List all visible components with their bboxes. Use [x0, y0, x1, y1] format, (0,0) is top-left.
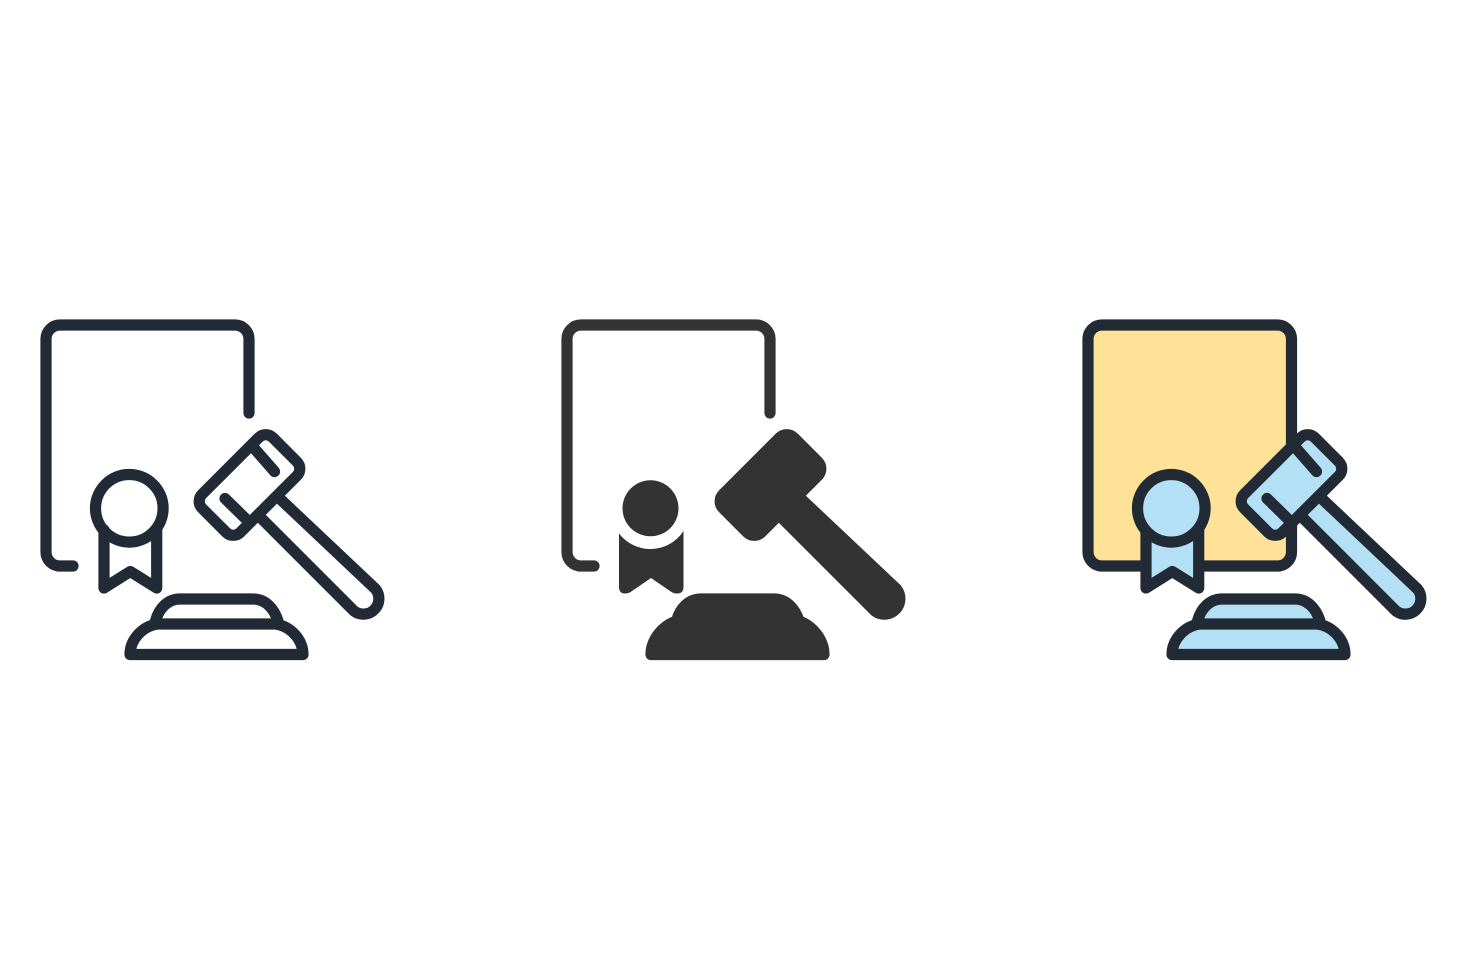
sound block — [1172, 599, 1345, 654]
document outline — [567, 325, 770, 566]
gavel head — [716, 431, 825, 539]
gavel head — [195, 431, 304, 539]
gavel head bands — [1267, 447, 1316, 522]
rosette disc — [622, 480, 678, 536]
icon: outline style — [46, 325, 379, 654]
gavel handle — [1300, 496, 1421, 614]
ribbon tails — [1146, 530, 1199, 588]
gavel handle — [258, 496, 379, 614]
ribbon tails — [619, 531, 684, 594]
gavel handle — [779, 496, 900, 614]
gavel head — [1237, 431, 1346, 539]
icon: solid style — [567, 325, 900, 654]
icon: coloured style — [1088, 325, 1421, 654]
sound block — [130, 599, 303, 654]
document outline — [46, 325, 249, 566]
document panel — [1088, 325, 1292, 566]
ribbon tails — [104, 530, 157, 588]
sound block — [651, 599, 824, 654]
rosette circle — [1138, 474, 1205, 542]
gavel head bands — [225, 447, 274, 522]
rosette circle — [96, 474, 163, 542]
